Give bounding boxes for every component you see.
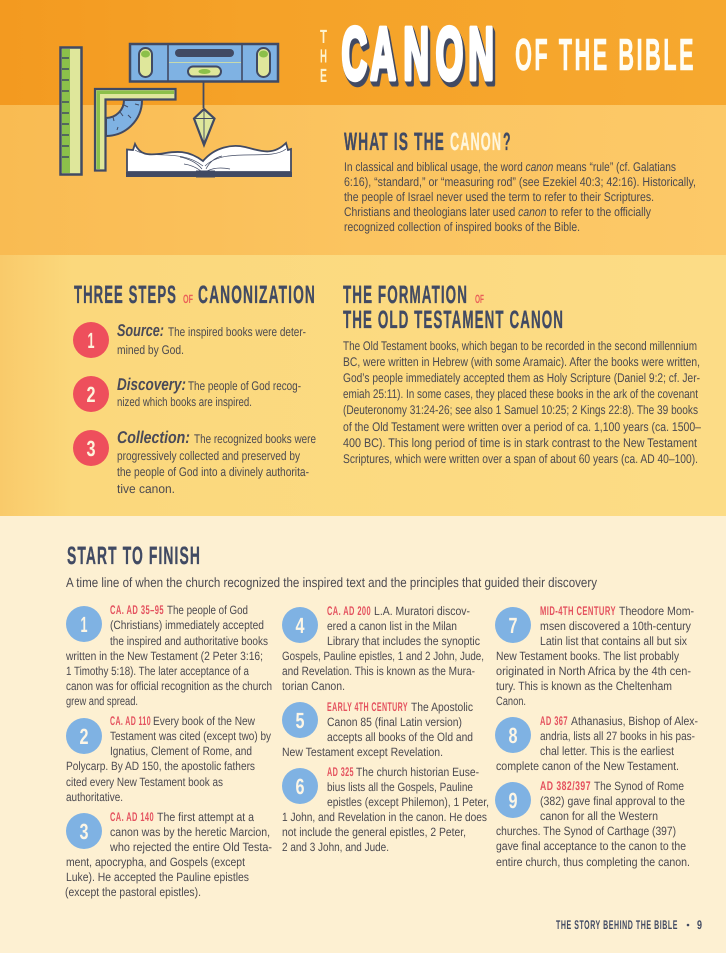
title word: THE: T	[320, 27, 327, 48]
section: what is the canon: ?	[503, 128, 512, 156]
heading: what is the canon: WHAT IS THE	[344, 128, 445, 156]
timeline entry 9: gave final acceptance to the canon to the	[496, 839, 686, 853]
timeline entry 6: The church historian Euse-	[356, 765, 479, 779]
timeline entry 9	[495, 779, 690, 869]
icon: ruler	[60, 48, 82, 174]
timeline entry 7: MID-4TH CENTURY	[540, 604, 616, 618]
text block: canon definition: recognized collection of inspired books of the Bible.	[344, 220, 580, 234]
step 3: collection: 3	[86, 436, 96, 461]
timeline entry 9: (382) gave final approval to the	[540, 794, 685, 808]
timeline entry 8: AD 367	[540, 714, 568, 728]
timeline entry 2: Every book of the New	[153, 714, 255, 728]
timeline entry 1: the inspired and authoritative books	[110, 634, 268, 648]
timeline entry 7	[495, 604, 694, 708]
timeline entry 8: chal letter. This is the earliest	[540, 744, 675, 758]
timeline entry 1: 1	[80, 612, 88, 637]
timeline entry 4	[282, 604, 484, 693]
icon: open book	[126, 143, 292, 178]
heading: formation of the old testament canon	[343, 281, 564, 334]
section: three steps of canonization	[73, 281, 316, 496]
step 3: collection: the people of God into a divinely authorita-	[117, 465, 309, 479]
timeline entry 2: cited every New Testament book as	[66, 775, 223, 789]
panel: what is the canon background	[0, 105, 726, 255]
timeline entry 6: AD 325	[327, 765, 354, 779]
timeline entry 7: msen discovered a 10th-century	[540, 619, 691, 633]
heading: three steps of canonization: OF	[183, 292, 193, 306]
timeline entry 4: Gospels, Pauline epistles, 1 and 2 John, Jude,	[282, 649, 484, 663]
timeline entry 3: (except the pastoral epistles).	[65, 885, 201, 899]
step 3: collection: The recognized books were	[194, 432, 316, 446]
timeline entry 8: 8	[508, 723, 518, 748]
timeline entry 4: L.A. Muratori discov-	[374, 604, 470, 618]
timeline entry 6: 2 and 3 John, and Jude.	[282, 840, 389, 854]
timeline entry 1: (Christians) immediately accepted	[110, 618, 264, 632]
timeline entry 3: who rejected the entire Old Testa-	[109, 840, 272, 854]
timeline entry 8	[495, 714, 698, 773]
icon: plumb bob	[194, 82, 214, 145]
timeline entry 6: bius lists all the Gospels, Pauline	[327, 780, 473, 794]
icon: spirit level	[130, 44, 278, 82]
panel: title band	[0, 0, 726, 105]
timeline entry 4: ered a canon list in the Milan	[327, 619, 457, 633]
timeline entry 5: 5	[296, 708, 304, 733]
timeline entry 7: Latin list that contains all but six	[540, 634, 687, 648]
title	[320, 12, 696, 95]
timeline entry 4: torian Canon.	[282, 679, 345, 693]
timeline entry 6: 1 John, and Revelation in the canon. He does	[282, 810, 487, 824]
timeline entry 9: canon for all the Western	[540, 809, 658, 823]
timeline entry 1	[65, 603, 272, 708]
timeline entry 7: 7	[508, 613, 518, 638]
timeline entry 2: CA. AD 110	[110, 714, 151, 728]
text block: formation paragraph	[343, 339, 701, 466]
timeline entry 5: New Testament except Revelation.	[282, 745, 443, 759]
step 2: discovery: 2	[86, 382, 96, 407]
timeline entry 3	[65, 810, 272, 899]
timeline entry 7: Canon.	[496, 694, 526, 708]
timeline entry 2: Testament was cited (except two) by	[110, 729, 271, 743]
text block: canon definition	[344, 160, 696, 234]
step 2: discovery: The people of God recog-	[188, 379, 301, 393]
timeline entry 8: Athanasius, Bishop of Alex-	[571, 714, 698, 728]
timeline entry 7: originated in North Africa by the 4th cen-	[496, 664, 691, 678]
subtitle: time line description: A time line of when the church recognized the inspired text and the principles that guided their discovery	[66, 575, 597, 590]
section: what is the canon	[344, 128, 696, 234]
timeline entry 2: Ignatius, Clement of Rome, and	[110, 744, 252, 758]
section: formation of the old testament canon	[343, 281, 701, 466]
timeline entry 5: accepts all books of the Old and	[327, 730, 473, 744]
step 3: collection: Collection:	[117, 428, 190, 447]
timeline entry 5: Canon 85 (final Latin version)	[327, 715, 462, 729]
step 1: source: 1	[88, 328, 94, 353]
timeline entry 7: New Testament books. The list probably	[496, 649, 679, 663]
timeline entry 9: churches. The Synod of Carthage (397)	[496, 824, 676, 838]
timeline entry 4: Library that includes the synoptic	[327, 634, 480, 648]
timeline entry 6	[282, 765, 489, 854]
timeline entry 1: 1 Timothy 5:18). The later acceptance of a	[66, 664, 249, 678]
text block: canon definition: In classical and biblical usage, the word canon means “rule” (cf. Galatians	[344, 160, 676, 174]
timeline entry 1: grew and spread.	[66, 694, 138, 708]
timeline entry 3: canon was by the heretic Marcion,	[110, 825, 270, 839]
timeline entry 2: Polycarp. By AD 150, the apostolic fathers	[66, 759, 255, 773]
icon: protractor	[106, 100, 142, 136]
timeline entry 9: The Synod of Rome	[594, 779, 684, 793]
timeline entry 4: CA. AD 200	[327, 604, 371, 618]
timeline entry 5: The Apostolic	[411, 700, 473, 714]
timeline entry 3: The first attempt at a	[157, 810, 254, 824]
step 1: source: mined by God.	[117, 343, 184, 357]
text block: canon definition: Christians and theologians later used canon to refer to the officially	[344, 205, 652, 219]
timeline entry 1: canon was for official recognition as the church	[66, 679, 272, 693]
step 1: source: The inspired books were deter-	[168, 325, 306, 339]
title word: CANON: CANON	[342, 12, 494, 95]
timeline entry 4: 4	[296, 613, 305, 638]
timeline entry 6: not include the general epistles, 2 Peter,	[282, 825, 466, 839]
timeline entry 1: CA. AD 35–95	[110, 603, 164, 617]
step 1: source	[73, 321, 306, 358]
panel: canonization and formation background	[0, 255, 726, 516]
timeline entry 6: 6	[296, 774, 304, 799]
illustration: measuring tools and open book	[60, 44, 292, 178]
step 2: discovery	[73, 375, 301, 412]
timeline entry 7: Theodore Mom-	[619, 604, 694, 618]
timeline entry 2	[66, 714, 271, 804]
step 3: collection	[73, 428, 316, 496]
timeline entry 7: tury. This is known as the Cheltenham	[496, 679, 672, 693]
title word: THE	[320, 27, 327, 87]
heading: what is the canon: CANON	[450, 128, 502, 156]
timeline entry 1: written in the New Testament (2 Peter 3:16;	[65, 649, 263, 663]
timeline entry 9: 9	[508, 788, 518, 813]
timeline entry 8: andria, lists all 27 books in his pas-	[540, 729, 695, 743]
step 3: collection: tive canon.	[117, 482, 175, 496]
timeline entry 9: entire church, thus completing the canon.	[496, 855, 690, 869]
timeline entry 5: EARLY 4TH CENTURY	[327, 700, 408, 714]
timeline entry 3: Luke). He accepted the Pauline epistles	[66, 870, 249, 884]
timeline entry 2: authoritative.	[66, 790, 123, 804]
title word: THE: H	[320, 46, 327, 68]
timeline entry 1: The people of God	[167, 603, 248, 617]
footer: page label: 9	[697, 918, 702, 932]
timeline entry 4: and Revelation. This is known as the Mura-	[282, 664, 475, 678]
timeline entry 5	[282, 700, 473, 759]
step 2: discovery: nized which books are inspired.	[117, 395, 252, 409]
heading: formation of the old testament canon: THE FORMATION	[343, 281, 468, 309]
text block: canon definition: the people of Israel never used the term to refer to their Scriptures.	[344, 190, 654, 204]
title word: THE: E	[320, 66, 327, 87]
timeline entry 3: ment, apocrypha, and Gospels (except	[66, 855, 246, 869]
heading: three steps of canonization: THREE STEPS	[74, 281, 177, 309]
timeline entry 6: epistles (except Philemon), 1 Peter,	[327, 795, 489, 809]
heading: start to finish: START TO FINISH	[67, 542, 201, 570]
heading: formation of the old testament canon: OF	[475, 292, 484, 306]
timeline entry 8: complete canon of the New Testament.	[496, 759, 679, 773]
step 2: discovery: Discovery:	[117, 375, 186, 394]
timeline entry 3: CA. AD 140	[110, 810, 154, 824]
icon: carpenter square	[95, 89, 176, 170]
timeline entry 9: AD 382/397	[540, 779, 591, 793]
timeline entry 2: 2	[80, 724, 88, 749]
heading: three steps of canonization: CANONIZATION	[198, 281, 316, 309]
timeline entry 3: 3	[80, 819, 88, 844]
panel: start to finish background	[0, 516, 726, 953]
step 1: source: Source:	[117, 321, 164, 340]
step 3: collection: progressively collected and preserved by	[117, 449, 301, 463]
